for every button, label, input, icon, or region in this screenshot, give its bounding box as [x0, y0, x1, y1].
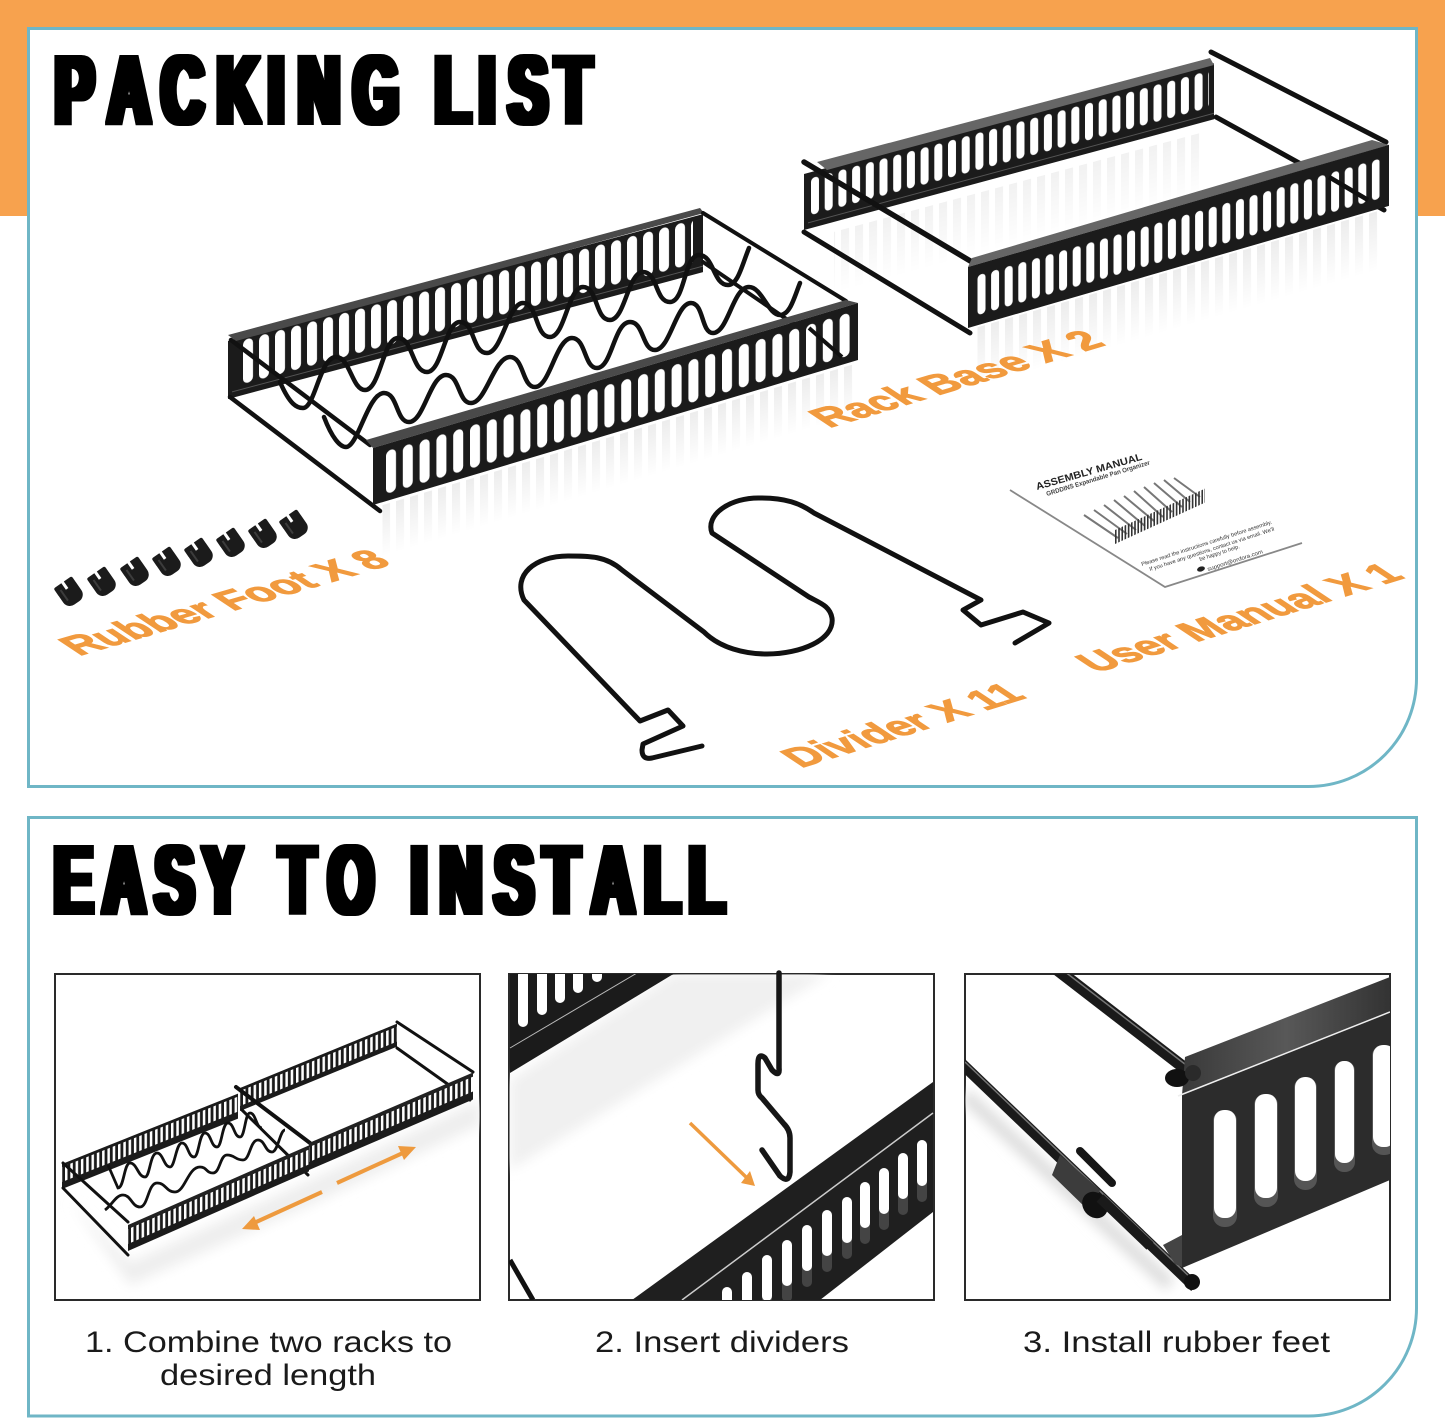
arrow: extend left: [242, 1192, 322, 1230]
label: user manual: User Manual X 1: [1065, 557, 1413, 678]
lip: [1182, 977, 1390, 1095]
panel: packing list: [28, 28, 1417, 786]
upper strip: [510, 973, 675, 1073]
lower strip: [632, 1082, 933, 1300]
step 3 caption: 3. Install rubber feet: [1023, 1326, 1330, 1359]
rubber feet: [53, 508, 311, 609]
manual drawing: [1084, 478, 1205, 544]
label: rack base: Rack Base X 2: [798, 324, 1114, 433]
divider wire: [521, 498, 1049, 758]
step 1 caption: [85, 1326, 452, 1392]
back strip: [804, 63, 1214, 230]
rack rods: [804, 52, 1386, 333]
orange background band: [0, 0, 1445, 216]
back strip: [228, 214, 703, 399]
reflections under racks: [373, 123, 1389, 560]
front strip: [968, 140, 1389, 267]
step 2 image: insert dividers: [508, 970, 935, 1301]
wave wires: [280, 248, 800, 447]
reflection: [510, 973, 830, 1170]
step 2 caption: 2. Insert dividers: [595, 1326, 849, 1359]
panel: easy to install: [28, 818, 1416, 1416]
manual title: ASSEMBLY MANUAL: [1035, 452, 1144, 493]
heading: packing list: PACKING LIST: [55, 36, 591, 144]
manual text: Please read the instructions carefully before assembly.: [1141, 520, 1273, 568]
manual subtitle: GRDDINS Expandable Pan Organizer: [1046, 460, 1151, 498]
user manual: [1010, 452, 1302, 587]
heading: easy to install: EASY TO INSTALL: [54, 826, 725, 934]
top rod: [1054, 974, 1185, 1071]
step 1 caption: 1. Combine two racks to: [85, 1326, 452, 1359]
arrow: insert direction: [690, 1123, 755, 1186]
label: rubber foot: Rubber Foot X 8: [48, 544, 400, 661]
label: divider: Divider X 11: [770, 677, 1035, 773]
step 1 caption: desired length: [160, 1359, 376, 1392]
rubber foot: [1052, 1151, 1150, 1246]
icon: email: [1196, 565, 1206, 573]
manual text: support@ordora.com: [1207, 549, 1264, 573]
divider hook: [758, 973, 790, 1179]
step 1 image: combine racks: [55, 974, 480, 1300]
step 3 image: install rubber feet: [960, 968, 1396, 1300]
rack base, open frame: [804, 52, 1389, 333]
arrow: extend right: [337, 1146, 416, 1183]
manual text: If you have any questions, contact us via email. We'll: [1149, 527, 1275, 573]
shadow: [965, 1095, 1170, 1285]
rack rods: [230, 213, 846, 511]
lower rod: [960, 1062, 1195, 1287]
slots: [1213, 1045, 1396, 1227]
rack base with wave divider supports: [228, 208, 858, 511]
front strip: [366, 300, 858, 448]
manual text: be happy to help.: [1199, 544, 1241, 563]
rods: [63, 1022, 473, 1255]
body: [1182, 1012, 1390, 1268]
reflection: [70, 1100, 480, 1285]
waves: [105, 1113, 285, 1210]
